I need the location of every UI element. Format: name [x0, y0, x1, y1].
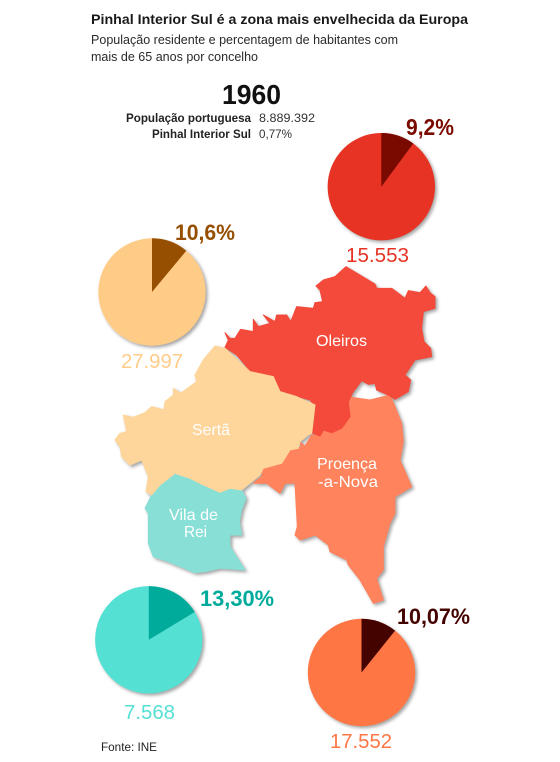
pie: Oleiros [328, 114, 454, 267]
map labels: Vila de [169, 507, 218, 524]
pie: Proença-a-Nova: 10,07% [397, 604, 470, 629]
subtitle: População residente e percentagem de habitantes com [91, 33, 398, 47]
pie: Oleiros: 9,2% [406, 114, 454, 140]
pie: Vila de Rei: 7.568 [124, 702, 175, 724]
region: Oleiros [225, 267, 435, 436]
pie: Proença-a-Nova: 17.552 [330, 731, 392, 753]
title: Pinhal Interior Sul é a zona mais envelhecida da Europa [91, 11, 468, 27]
population stats: 8.889.392 [259, 111, 315, 125]
population stats: 0,77% [259, 127, 292, 141]
pie: Sertã: 27.997 [121, 351, 183, 373]
map labels: Rei [184, 524, 207, 541]
year heading: 1960 [222, 79, 281, 110]
subtitle [91, 33, 398, 64]
map labels: Oleiros [316, 333, 367, 350]
pie: Sertã [98, 220, 235, 373]
map of municipalities [115, 267, 435, 603]
population stats: População portuguesa [126, 111, 251, 125]
pie: Oleiros: 15.553 [346, 245, 409, 267]
population stats: Pinhal Interior Sul [152, 127, 251, 141]
population stats [126, 111, 315, 141]
pie: Vila de Rei [95, 586, 274, 724]
pie: Sertã: 10,6% [175, 220, 235, 245]
map labels: Sertã [192, 422, 230, 439]
map labels: -a-Nova [318, 474, 378, 491]
source: Fonte: INE [101, 740, 157, 754]
pie: Vila de Rei: 13,30% [200, 586, 274, 611]
map labels: Proença [317, 456, 377, 473]
subtitle: mais de 65 anos por concelho [91, 50, 258, 64]
region: Proença-a-Nova [253, 395, 412, 603]
map labels [169, 333, 378, 541]
region: Sertã [115, 346, 315, 495]
pie: Proença-a-Nova [308, 604, 470, 753]
region: Vila de Rei [145, 473, 246, 573]
